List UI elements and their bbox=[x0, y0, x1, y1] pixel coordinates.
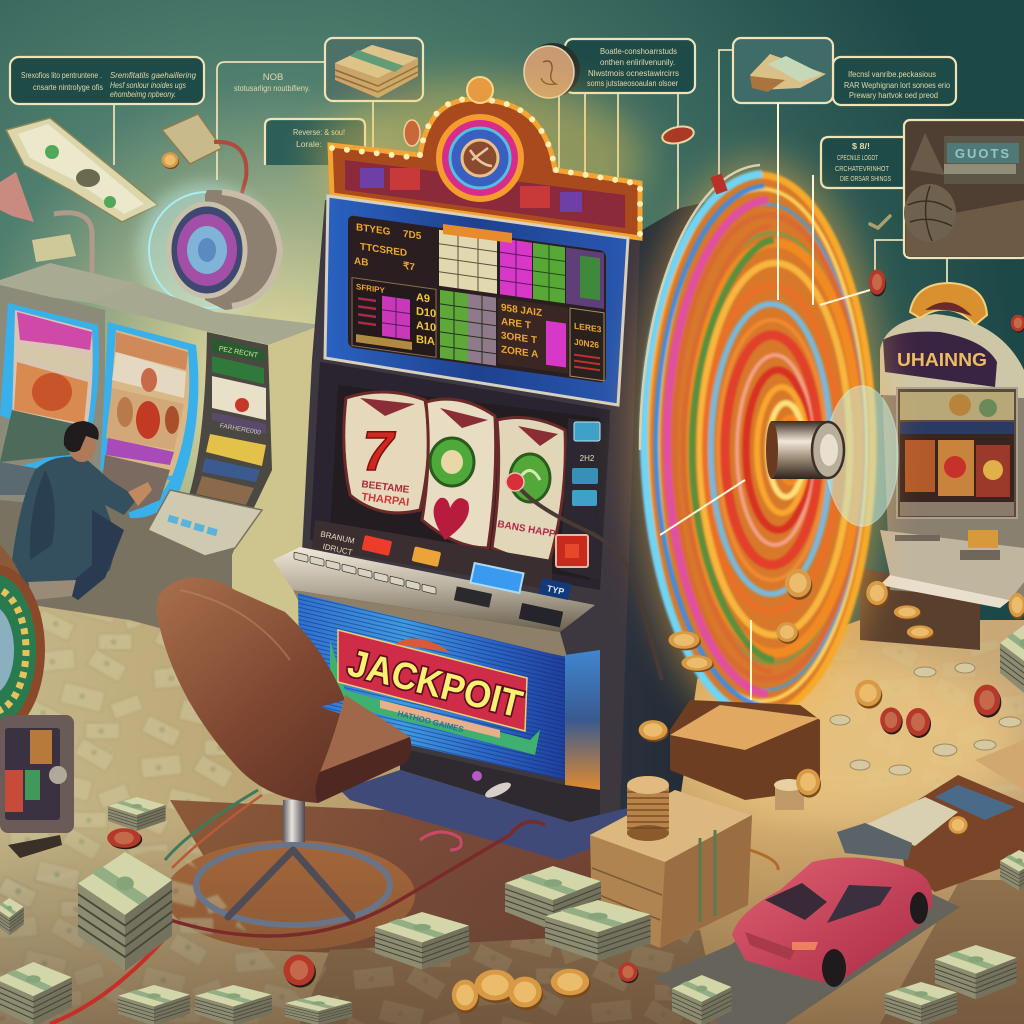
callout: bill picture with text: Ifecnsl vanribe.peckasious bbox=[848, 70, 936, 79]
chair back and seat bbox=[156, 578, 411, 803]
plaque sub label bbox=[380, 700, 500, 738]
callout: top left text: Hesf sonlour inoides ugs bbox=[110, 81, 186, 90]
green grid bbox=[533, 243, 565, 303]
machine screen one bbox=[0, 303, 99, 478]
chair bbox=[156, 578, 411, 925]
callout: NOB with money stack picture: stotusarlign noutbifieny. bbox=[234, 84, 310, 93]
top deck one bbox=[0, 263, 135, 303]
small device bottom left bbox=[0, 715, 74, 858]
left slot machines: FARHERE000 bbox=[219, 422, 262, 437]
callout: top left text: cnsarte nintrolyge ofis bbox=[33, 83, 103, 92]
callout: bill picture with text: Prewary hartvok oed preod bbox=[849, 91, 938, 100]
beige grid bbox=[439, 230, 497, 294]
left slot machines bbox=[0, 263, 322, 650]
right slot machine: UHAINNG bbox=[897, 350, 987, 370]
reels: THARPAI bbox=[361, 491, 410, 509]
pay table screen: LERE3 bbox=[574, 321, 602, 334]
purple green panel bbox=[566, 248, 604, 309]
callout: reverse small box: Reverse: & sou! bbox=[293, 128, 345, 137]
plaque red bbox=[338, 630, 527, 731]
arc marquee bbox=[910, 283, 987, 325]
top left panel text: AB bbox=[354, 256, 368, 269]
top deck two bbox=[90, 283, 322, 345]
callout: reverse small box bbox=[265, 119, 365, 165]
money stacks bbox=[0, 625, 1024, 1024]
pay table screen: SFRIPY bbox=[356, 282, 385, 295]
pay table screen: ARE T bbox=[501, 316, 532, 332]
pay table screen: J0N26 bbox=[574, 337, 599, 350]
reel pointers bbox=[360, 398, 558, 446]
desk box bbox=[670, 700, 820, 800]
roulette wheel bottom left bbox=[0, 565, 45, 735]
plaque crown bbox=[395, 639, 450, 652]
right stacks bbox=[885, 982, 957, 1024]
number column: A9 bbox=[416, 292, 430, 305]
callout: bill picture with text: RAR Wephignan lort sonoes erio bbox=[844, 81, 951, 90]
symbol heart bbox=[434, 498, 469, 540]
top left panel text: 7D5 bbox=[403, 229, 422, 242]
number column: D10 bbox=[416, 306, 436, 320]
callout: small note box: CPECNILE LOGOT bbox=[837, 155, 878, 162]
symbol green two bbox=[510, 454, 550, 502]
reels: BANS HAPP bbox=[496, 519, 557, 540]
tray case bbox=[837, 740, 1024, 892]
left slot machines: PEZ RECNT bbox=[218, 346, 259, 360]
callout: small note box: DIE ORSAR SHINGS bbox=[840, 176, 891, 183]
callout: NOB with money stack picture: NOB bbox=[263, 72, 283, 83]
screen frame bbox=[325, 196, 628, 405]
top left panel text: BTYEG bbox=[356, 222, 391, 238]
lever bbox=[506, 473, 662, 680]
cabinet side bbox=[232, 325, 322, 650]
UHAINNG panel bbox=[883, 332, 997, 387]
coins and chips bbox=[107, 152, 1024, 1013]
central stacks bbox=[505, 866, 601, 931]
machine base bbox=[340, 748, 640, 860]
callout: NOB with money stack picture bbox=[217, 38, 423, 180]
icon: portal wheel left bbox=[137, 182, 282, 318]
bottom center stack bbox=[672, 975, 732, 1024]
orange text panel bbox=[498, 298, 568, 374]
jackpot lettering: JACKPOIT bbox=[343, 642, 526, 726]
floor bbox=[0, 590, 1024, 1024]
machine screen two bbox=[100, 322, 198, 518]
number column bbox=[416, 292, 436, 348]
button strip above console: IDRUCT bbox=[322, 542, 353, 557]
side banknotes bbox=[0, 172, 92, 275]
machine back one bbox=[0, 285, 105, 510]
glass portal bbox=[826, 386, 898, 526]
console deck: TYP bbox=[546, 583, 565, 597]
main machine right cabinet bbox=[590, 190, 760, 815]
pay table screen: 958 JAIZ bbox=[501, 302, 542, 319]
info panel bbox=[186, 332, 272, 520]
callout: coin with text bbox=[524, 39, 695, 215]
machine body bbox=[882, 385, 1024, 600]
callout: top left text: Sremfitatils gaehaillering bbox=[110, 71, 197, 80]
small banknote bbox=[162, 114, 222, 164]
symbol seven: 7 bbox=[362, 419, 396, 482]
callout: small note box: $ 8/! bbox=[852, 142, 870, 151]
number column: A10 bbox=[416, 320, 436, 334]
large stack left bbox=[78, 852, 172, 971]
main machine body bbox=[300, 200, 640, 825]
dome bbox=[880, 314, 1024, 398]
button strip above console: BRANUM bbox=[320, 530, 356, 546]
callout: reverse small box: Lorale: bbox=[296, 140, 322, 149]
marquee topper bbox=[315, 77, 645, 240]
green and grey grid bbox=[440, 290, 468, 362]
metal side strip bbox=[565, 650, 600, 790]
callout: top left text: ehombeimg npbeony. bbox=[110, 90, 176, 99]
reel labels: BEETAME bbox=[361, 479, 410, 496]
bottom left stacks bbox=[0, 962, 72, 1024]
large banknote bbox=[6, 118, 158, 222]
small stack on floor bbox=[108, 797, 166, 831]
spinning wheel spiral bbox=[635, 160, 885, 730]
chair base bbox=[196, 845, 390, 925]
callout: small note box bbox=[821, 137, 905, 188]
button strip above console bbox=[312, 520, 552, 590]
lower body bbox=[0, 480, 322, 650]
bottom left panel bbox=[352, 278, 436, 357]
far right panel bbox=[570, 308, 604, 381]
floor cables bbox=[50, 790, 778, 1024]
lower jackpot panel: HATHOO GAIMES bbox=[397, 709, 465, 734]
icon: flying chip bbox=[661, 124, 695, 146]
man seated at machine bbox=[0, 421, 152, 610]
chair stem bbox=[283, 800, 305, 848]
symbol green coin bbox=[430, 438, 474, 486]
side buttons: 2H2 bbox=[580, 454, 595, 463]
right slot machine bbox=[860, 283, 1024, 650]
scattered silver coins bbox=[830, 663, 1021, 775]
callout: top left text bbox=[10, 57, 204, 165]
shipping boxes bbox=[590, 790, 752, 948]
callout: coin with text: Nlwstmois ocnestawircirrs bbox=[588, 69, 679, 78]
lower dark box bbox=[860, 568, 980, 650]
top left panel text: TTCSRED bbox=[360, 242, 407, 259]
magenta grid bbox=[500, 238, 532, 299]
picture: ruined arcade scene: GUOTS bbox=[955, 146, 1011, 161]
cable from small banknote bbox=[214, 142, 246, 200]
callout: coin with text: onthen enlirilvenunily. bbox=[600, 58, 675, 67]
plaque green trim bbox=[330, 640, 540, 755]
pay table screen: 3ORE T bbox=[501, 330, 538, 347]
reels bbox=[330, 385, 600, 580]
lower jackpot panel bbox=[298, 593, 565, 780]
metal hub bbox=[766, 421, 844, 479]
console deck bbox=[273, 547, 595, 657]
small coin stack bbox=[774, 779, 804, 810]
coin stack on box bbox=[627, 776, 669, 841]
callout: bill picture with text bbox=[719, 38, 956, 180]
lower console one bbox=[0, 462, 75, 495]
callout: coin with text: Boatle-conshoarrstuds bbox=[600, 47, 677, 56]
pay table screen: ZORE A bbox=[501, 344, 538, 361]
console bbox=[880, 530, 1024, 600]
orange plaque bbox=[443, 224, 512, 243]
callout: small note box: CRCHATEVRINHOT bbox=[835, 166, 890, 173]
red car bbox=[732, 858, 932, 987]
number column: BIA bbox=[416, 334, 435, 348]
pay table screen bbox=[348, 215, 606, 383]
floor mat bbox=[655, 860, 960, 1024]
side buttons bbox=[556, 418, 610, 580]
screen bbox=[897, 388, 1017, 518]
picture: ruined arcade scene bbox=[875, 120, 1024, 300]
callout: coin with text: soms jutstaeosoaulan olsoer bbox=[587, 79, 678, 88]
top left panel text bbox=[354, 222, 422, 276]
callout line through wheel bbox=[660, 103, 870, 700]
icon: tick mark bbox=[870, 216, 890, 228]
console bbox=[148, 490, 262, 556]
top left panel text: ₹7 bbox=[403, 261, 415, 273]
callout: top left text: Srexofios lito pentruntene . bbox=[21, 71, 102, 80]
